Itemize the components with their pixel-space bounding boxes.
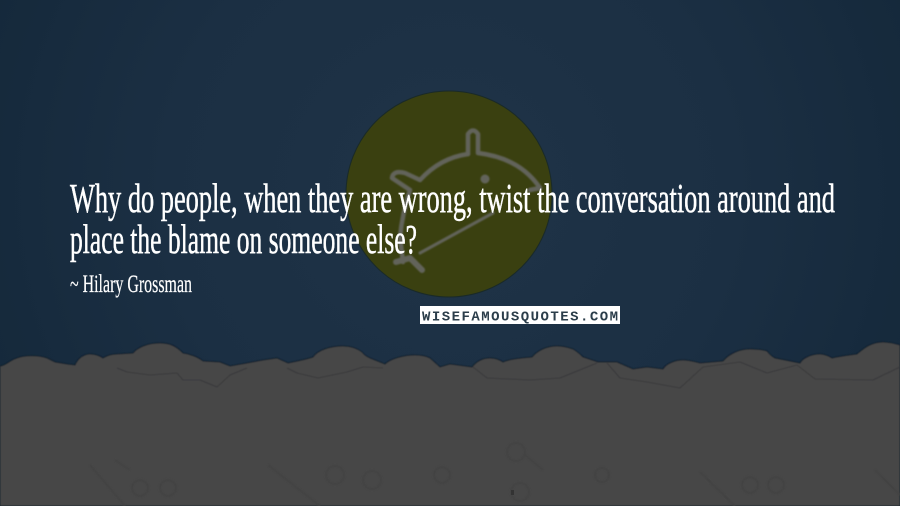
quote text: [70, 175, 835, 262]
author attribution: ~ Hilary Grossman: [70, 271, 192, 298]
quote text: place the blame on someone else?: [70, 216, 417, 262]
ground: layered clouds: [0, 342, 900, 506]
watermark logo: WISEFAMOUSQUOTES.COM: [422, 310, 618, 326]
speck on the ground: [511, 490, 514, 495]
icon: olive circle with faint bird outline: [346, 91, 552, 297]
faint decorative ground marks: [90, 443, 900, 506]
